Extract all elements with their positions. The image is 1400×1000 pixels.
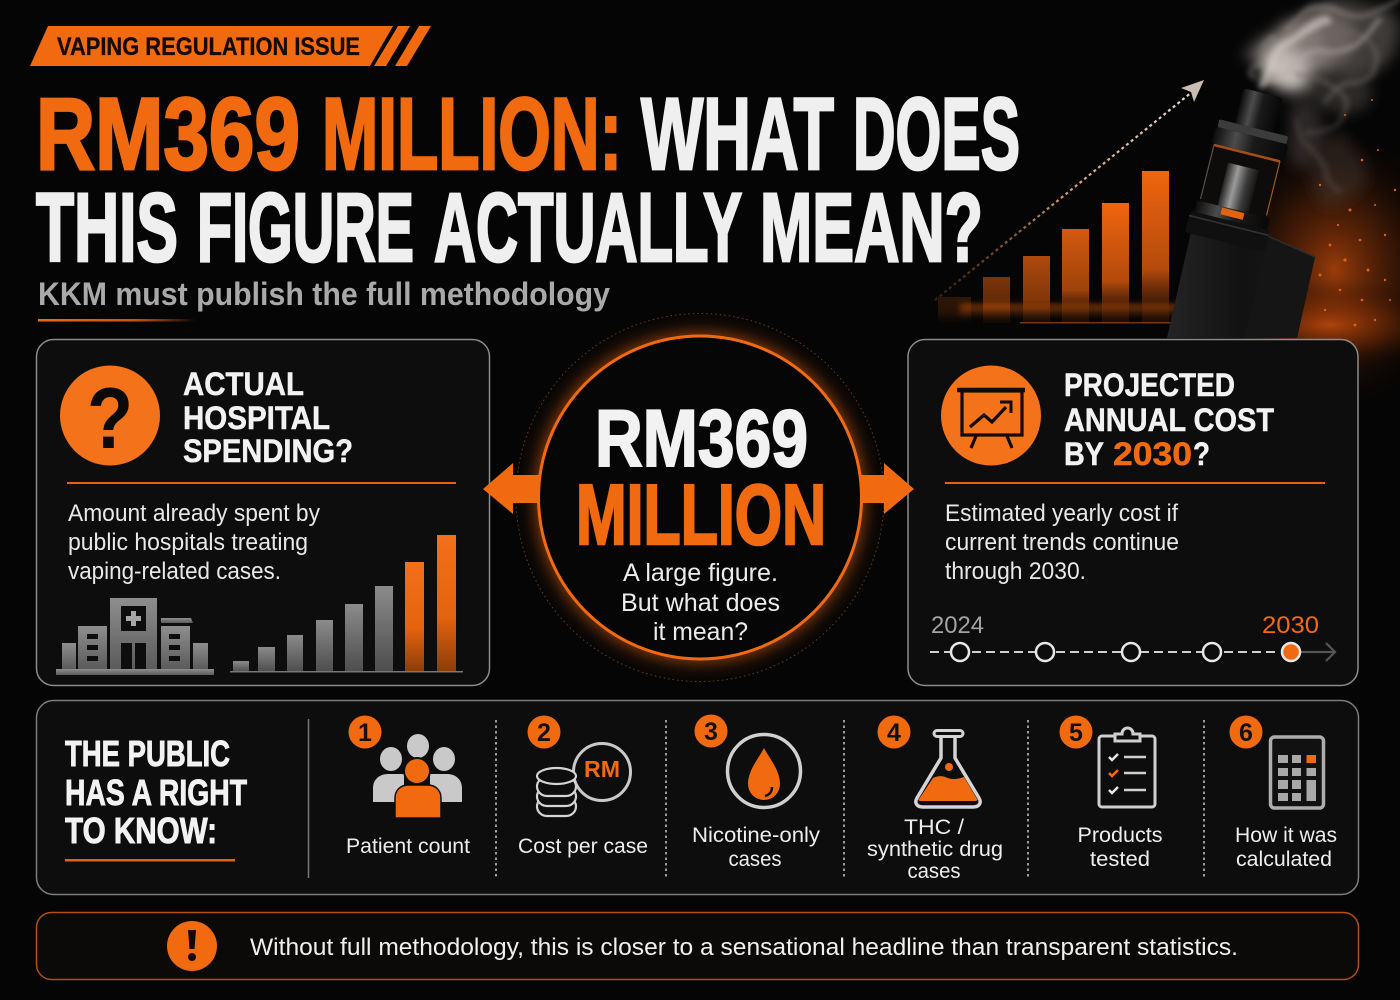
item 5: products tested: 5 (1069, 719, 1083, 747)
background glow behind vape (960, 120, 1400, 420)
warning text: Without full methodology, this is closer to a sensational headline than transparent statistics. (250, 934, 1238, 961)
title (36, 77, 1020, 282)
item 6: how it was calculated (1230, 716, 1337, 871)
title: MEAN? (760, 173, 983, 282)
icon: presentation chart (941, 366, 1041, 466)
heading: projected annual cost: 2030 (1113, 436, 1192, 472)
description text: Amount already spent by (68, 500, 320, 527)
item 1: patient count: Patient count (346, 835, 470, 858)
timeline 2024 to 2030 (930, 612, 1335, 661)
title: RM369 (36, 77, 300, 191)
issue tag: VAPING REGULATION ISSUE (57, 33, 360, 61)
description text: public hospitals treating (68, 529, 308, 556)
heading: projected annual cost: ? (1193, 436, 1210, 472)
item 2: cost per case: RM (584, 756, 620, 782)
heading: projected annual cost: BY (1064, 436, 1104, 472)
heading: right to know (65, 733, 247, 851)
heading: right to know: HAS A RIGHT (65, 772, 247, 813)
description text: vaping-related cases. (68, 558, 281, 585)
heading: actual hospital spending: HOSPITAL (183, 400, 330, 436)
item 5: products tested: Products (1078, 824, 1162, 847)
heading: right to know: TO KNOW: (65, 810, 217, 851)
issue tag (30, 26, 431, 66)
description text (945, 500, 1179, 585)
heading: actual hospital spending: ACTUAL (183, 366, 304, 402)
item 4: THC / synthetic drug cases: 4 (887, 719, 901, 747)
item 3: nicotine-only cases: cases (728, 848, 782, 871)
icon: hospital (56, 598, 214, 675)
item 1: patient count (346, 716, 470, 858)
figure: MILLION: MILLION (576, 468, 826, 563)
icon: exclamation (167, 921, 217, 971)
item 6: how it was calculated: calculated (1236, 848, 1332, 871)
item 4: THC / synthetic drug cases: THC / (904, 816, 964, 839)
title: WHAT (641, 77, 834, 191)
item 5: products tested: tested (1090, 848, 1150, 871)
item 6: how it was calculated: 6 (1239, 719, 1253, 747)
subtitle underline (38, 319, 196, 322)
title: DOES (853, 77, 1020, 191)
heading: projected annual cost (1064, 367, 1274, 472)
title: MILLION: (322, 77, 622, 191)
icon: question mark: ? (87, 371, 133, 467)
vape device (1167, 83, 1315, 338)
bar chart: rising cost (938, 171, 1230, 324)
item 2: cost per case: 2 (537, 719, 551, 747)
item 3: nicotine-only cases: Nicotine-only (692, 824, 821, 847)
description text: current trends continue (945, 529, 1179, 556)
caption (621, 559, 780, 646)
title: ACTUALLY (434, 173, 742, 282)
heading: right to know: THE PUBLIC (65, 733, 230, 774)
item 3: nicotine-only cases: 3 (704, 718, 718, 746)
warning banner (36, 912, 1358, 980)
panel: projected annual cost (908, 340, 1358, 686)
subtitle: KKM must publish the full methodology (38, 276, 610, 312)
item 4: THC / synthetic drug cases: synthetic drug (867, 838, 1003, 861)
item 1: patient count: 1 (358, 719, 372, 747)
title: FIGURE (197, 173, 414, 282)
sparks (1318, 99, 1396, 326)
icon: question mark (60, 366, 160, 467)
arrow: right (858, 463, 914, 514)
panel: actual hospital spending (36, 340, 490, 686)
description text: Estimated yearly cost if (945, 500, 1178, 527)
title: THIS (36, 173, 178, 282)
description text (68, 500, 320, 585)
central figure circle (483, 310, 914, 684)
heading: projected annual cost: PROJECTED (1064, 367, 1235, 403)
caption: it mean? (653, 618, 748, 646)
caption: But what does (621, 589, 780, 617)
timeline 2024 to 2030: 2030 (1262, 612, 1319, 639)
heading: actual hospital spending (183, 366, 353, 469)
dashed trend arrow (935, 80, 1204, 300)
item 5: products tested (1060, 716, 1162, 871)
arrow: left (483, 463, 542, 514)
description text: through 2030. (945, 558, 1086, 585)
figure: RM369: RM369 (595, 394, 808, 484)
item 2: cost per case: Cost per case (518, 835, 648, 858)
caption: A large figure. (623, 559, 778, 587)
item 6: how it was calculated: How it was (1235, 824, 1337, 847)
heading: projected annual cost: ANNUAL COST (1064, 402, 1274, 438)
heading: actual hospital spending: SPENDING? (183, 433, 353, 469)
bar chart: hospital spending (230, 535, 463, 672)
item 3: nicotine-only cases (692, 714, 821, 871)
smoke (1247, 0, 1400, 204)
timeline 2024 to 2030: 2024 (931, 612, 984, 639)
item 4: THC / synthetic drug cases (867, 716, 1003, 883)
panel: the public has a right to know (36, 700, 1358, 894)
item 4: THC / synthetic drug cases: cases (908, 860, 960, 883)
item 2: cost per case (518, 716, 648, 858)
